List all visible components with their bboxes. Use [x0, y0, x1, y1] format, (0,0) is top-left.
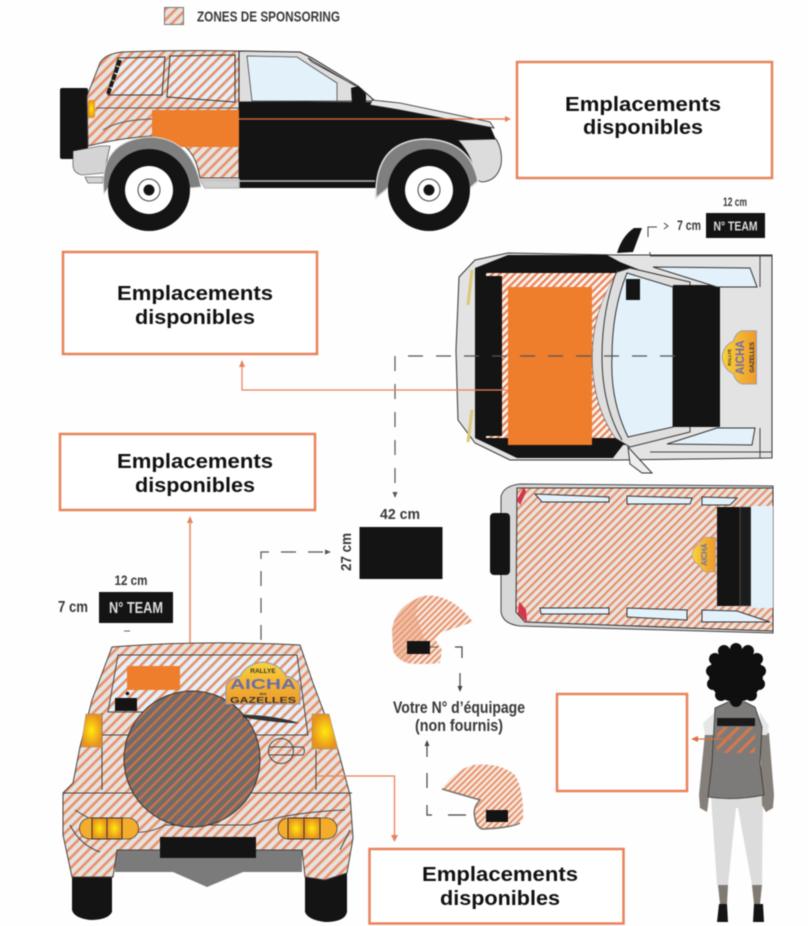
windshield — [612, 273, 673, 437]
top side window — [653, 267, 757, 287]
small black number plate — [626, 279, 640, 300]
label: votre numero d'equipage — [393, 698, 525, 735]
sill — [200, 180, 375, 188]
box: emplacements disponibles mid left: disponibles — [135, 475, 255, 497]
helmet upper — [392, 596, 473, 664]
arrow: person back zone to box — [691, 736, 732, 742]
logo on rear roof: AICHA — [700, 543, 709, 566]
box: emplacements disponibles bottom — [370, 849, 624, 924]
logo rallye aicha des gazelles: GAZELLES — [230, 695, 296, 705]
wing mirror bottom — [628, 447, 652, 473]
hatched side windows — [108, 55, 235, 102]
vest — [708, 702, 764, 799]
rear view of the car — [63, 643, 353, 922]
side tail lamp — [88, 100, 95, 118]
orange sponsoring panel rear window — [127, 666, 180, 690]
dashed guide: label to lower helmet — [424, 740, 466, 815]
black front body — [239, 102, 497, 188]
rear bumper side — [73, 146, 110, 183]
logo on roof: GAZELLES — [749, 342, 756, 373]
front wheel — [388, 149, 470, 231]
dimension: 12 cm by 7 cm team plate, rear: N° TEAM — [109, 600, 163, 617]
helmet lower — [442, 764, 523, 829]
orange sponsoring panel side — [152, 110, 239, 147]
front bumper side — [458, 139, 501, 182]
rear wheel — [108, 149, 190, 231]
legend: zones de sponsoring: ZONES DE SPONSORING — [197, 8, 340, 26]
box: emplacements disponibles top right: disponibles — [583, 117, 703, 139]
small team plate — [115, 692, 137, 711]
rear tyres — [72, 870, 347, 922]
right fog lights — [278, 818, 337, 839]
top view of the car, rear — [490, 484, 773, 633]
logo rallye aicha des gazelles: des — [260, 691, 267, 696]
rear window hatched — [108, 655, 308, 735]
bottom side window — [667, 428, 755, 445]
dimension: 42 cm by 27 cm plate: 42 cm — [380, 506, 420, 523]
rear quarter slit — [108, 60, 120, 94]
back number band — [717, 718, 755, 726]
hatched hood — [486, 273, 617, 438]
box: emplacements disponibles mid left — [60, 434, 315, 510]
top side windows — [535, 494, 737, 505]
logo on rear roof — [692, 537, 716, 572]
shoes — [717, 904, 764, 922]
bottom side windows — [540, 608, 770, 622]
arrow: hood panel to box — [239, 360, 508, 390]
dimension: 12 cm by 7 cm team plate, windshield: 12 cm — [723, 195, 747, 209]
legend: zones de sponsoring — [164, 8, 340, 26]
hatched back zone — [717, 727, 755, 753]
arrow: rear window panel to box — [180, 516, 193, 675]
rear arch — [103, 137, 201, 194]
outer rear body — [501, 484, 773, 633]
black rear window band — [717, 507, 740, 606]
logo on roof — [722, 331, 756, 384]
logo rallye aicha des gazelles: RALLYE — [250, 668, 276, 675]
box: emplacements disponibles mid left: Emplacements — [117, 451, 273, 473]
legs — [711, 796, 763, 885]
fuel cap — [268, 738, 304, 764]
hatched rear body zone — [87, 51, 239, 178]
hatched body — [63, 643, 353, 880]
dimension: 12 cm by 7 cm team plate, windshield — [641, 195, 765, 288]
right tail lamp — [312, 714, 338, 749]
box: emplacements disponibles upper left: Emplacements — [117, 283, 273, 305]
wiper — [243, 715, 298, 723]
hatched roof and sides — [516, 488, 773, 631]
top view of the car, front — [456, 228, 772, 473]
person seen from the back — [699, 643, 774, 922]
hair — [706, 643, 766, 707]
blue windshield rear top — [751, 506, 773, 608]
box: emplacements disponibles bottom: disponibles — [440, 888, 560, 910]
box: emplacements disponibles upper left: disponibles — [135, 307, 255, 329]
wing mirror — [351, 86, 366, 105]
dimension: 42 cm by 27 cm plate: 27 cm — [338, 533, 355, 571]
headlights — [468, 270, 472, 442]
box: emplacements disponibles upper left — [63, 252, 317, 354]
outer body — [456, 253, 772, 460]
box: emplacements disponibles top right: Emplacements — [565, 94, 721, 116]
wing mirror top — [617, 228, 642, 253]
black hood surround — [475, 255, 640, 458]
box: emplacements disponibles bottom: Emplacements — [422, 864, 578, 886]
radiator black strip — [486, 276, 502, 436]
door pillar and window frame — [239, 51, 375, 102]
label: votre numero d'equipage: Votre N° d’équipage — [393, 698, 525, 717]
rear number plate — [160, 837, 256, 858]
dimension: 12 cm by 7 cm team plate, rear — [58, 572, 173, 631]
sleeves — [703, 712, 769, 735]
arms — [699, 733, 774, 812]
logo on roof: AICHA — [735, 340, 747, 374]
arrow: side panel to box — [239, 116, 511, 122]
logo rallye aicha des gazelles — [226, 662, 300, 705]
dimension: 12 cm by 7 cm team plate, windshield: 7 cm — [677, 217, 701, 233]
icon: side spare wheel — [60, 88, 88, 159]
dimension: 12 cm by 7 cm team plate, windshield: N° TEAM — [714, 218, 758, 234]
left tail lamp — [81, 714, 102, 747]
label: votre numero d'equipage: (non fournis) — [415, 716, 503, 735]
left fog lights — [80, 818, 138, 839]
windshield surround — [592, 268, 690, 447]
grey roof — [720, 290, 770, 426]
dimension: 42 cm by 27 cm plate — [338, 506, 442, 579]
dimension: 12 cm by 7 cm team plate, rear: 12 cm — [114, 572, 148, 588]
ankles — [718, 885, 762, 904]
orange sponsoring panel hood — [508, 287, 592, 445]
black roof band — [673, 285, 720, 427]
arrow: rear body to box — [317, 776, 398, 842]
dimension: 12 cm by 7 cm team plate, rear: 7 cm — [58, 599, 88, 616]
grey under tray — [115, 848, 302, 887]
rear spare wheel top — [490, 513, 510, 575]
spare wheel rear — [124, 691, 260, 827]
side view of the car — [60, 51, 501, 231]
logo on roof: RALLYE — [727, 349, 732, 366]
logo rallye aicha des gazelles: AICHA — [230, 676, 296, 693]
dashed guide: upper helmet to label — [455, 647, 462, 692]
box: empty box next to person — [557, 694, 687, 791]
box: emplacements disponibles top right — [517, 62, 772, 178]
front arch — [376, 139, 478, 198]
door window — [247, 56, 337, 101]
dashed guide: hood to 42 cm plate — [392, 356, 675, 498]
dashed guide: rear logo to plate — [261, 550, 331, 640]
red lights — [518, 489, 526, 620]
